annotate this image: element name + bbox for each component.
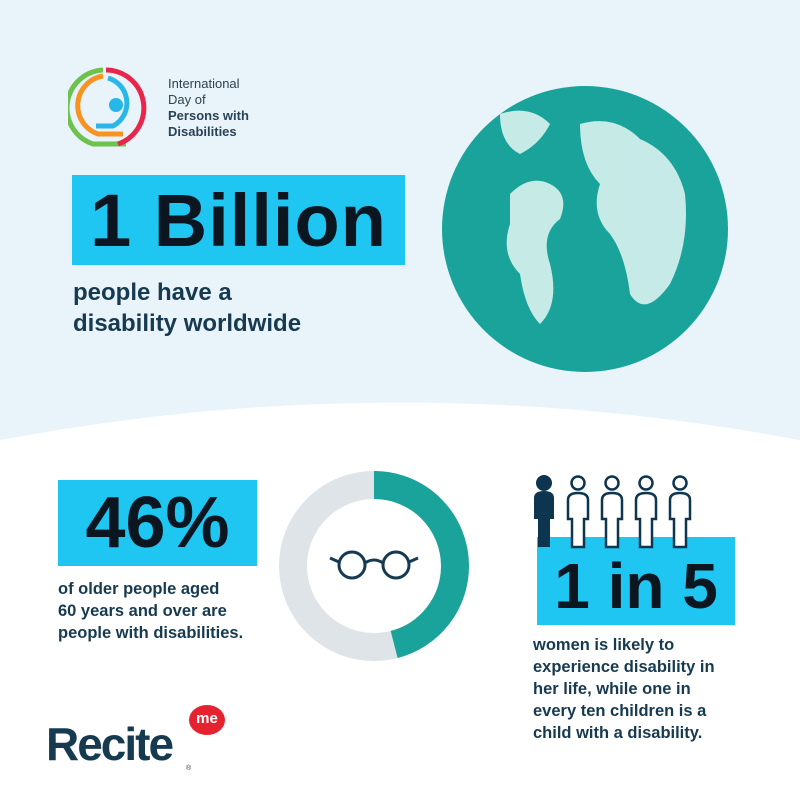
1 in 5 text: experience disability in [533, 658, 715, 676]
1 Billion box: 1 Billion [90, 178, 387, 262]
people icons [534, 475, 692, 548]
subtitle [73, 279, 301, 337]
Recite me logo: me [196, 710, 218, 727]
subtitle: people have a [73, 279, 232, 306]
46% text: people with disabilities. [58, 624, 243, 642]
logo [68, 68, 249, 146]
donut chart [279, 471, 469, 661]
46% box [58, 480, 257, 566]
Recite me logo: Recite [46, 718, 172, 770]
logo text: Disabilities [168, 124, 237, 139]
globe [442, 86, 728, 372]
Recite me logo: ® [186, 765, 191, 772]
subtitle: disability worldwide [73, 310, 301, 337]
46% text: 60 years and over are [58, 602, 227, 620]
1 in 5 box [537, 537, 735, 625]
1 in 5 text: her life, while one in [533, 680, 691, 698]
46% box: 46% [85, 483, 230, 563]
logo text: Persons with [168, 108, 249, 123]
46% text: of older people aged [58, 580, 219, 598]
1 in 5 text [533, 636, 715, 742]
Recite me logo [46, 705, 225, 772]
1 in 5 text: every ten children is a [533, 702, 706, 720]
1 in 5 box: 1 in 5 [554, 550, 718, 622]
icon: glasses [330, 552, 418, 578]
logo text [168, 76, 249, 139]
1 in 5 text: women is likely to [533, 636, 674, 654]
logo text: International [168, 76, 240, 91]
46% text [58, 580, 243, 642]
1 in 5 text: child with a disability. [533, 724, 702, 742]
logo text: Day of [168, 92, 206, 107]
